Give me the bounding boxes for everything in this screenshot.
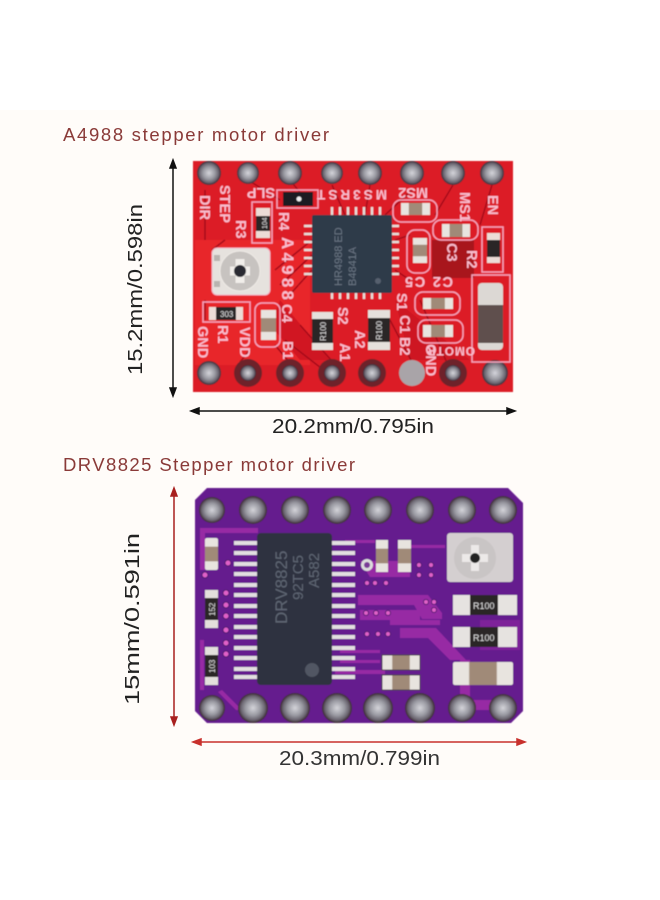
- component outlines: [203, 190, 510, 362]
- silkscreen labels: R1: [214, 325, 230, 344]
- silkscreen labels: A2: [351, 330, 367, 349]
- resistors and capacitors: [209, 192, 503, 350]
- panel: A4988 red board: [193, 161, 513, 392]
- silkscreen labels: S1: [393, 293, 409, 311]
- potentiometer: [212, 248, 270, 295]
- chip: DRV8825: DRV8825: [272, 551, 291, 624]
- vias: [202, 560, 436, 657]
- label: 20.3mm: 20.3mm/0.799in: [279, 748, 440, 770]
- silkscreen labels: SLP: [246, 184, 275, 200]
- heading: DRV8825: DRV8825 Stepper motor driver: [63, 454, 355, 475]
- resistors and capacitors: 104: [262, 217, 269, 229]
- traces: [205, 180, 492, 375]
- chip: HR4988: [304, 207, 399, 299]
- silkscreen labels: R2: [463, 250, 479, 269]
- silkscreen labels: OMOTR: [427, 344, 475, 358]
- background panel: [0, 110, 660, 780]
- silkscreen labels: GND: [422, 344, 438, 376]
- silkscreen labels: MS3RST: [316, 187, 387, 202]
- silkscreen labels: A4988: [278, 237, 297, 300]
- chip: DRV8825: [234, 533, 355, 685]
- label: 15mm: 15mm/0.591in: [122, 533, 144, 705]
- pins: bottom row: [199, 693, 517, 723]
- label: 20.2mm: 20.2mm/0.795in: [272, 416, 434, 438]
- silkscreen labels: EN: [484, 195, 500, 215]
- silkscreen labels: DIR: [196, 195, 212, 220]
- chip: HR4988: B4841A: [347, 246, 359, 286]
- potentiometer: [447, 533, 513, 582]
- resistors and capacitors: 152: [208, 602, 217, 616]
- panel: DRV8825 purple board: [195, 488, 523, 723]
- pins: bottom row: [197, 359, 508, 387]
- dimension arrow: A4988 width: [191, 408, 515, 414]
- copper traces: [200, 528, 520, 710]
- silkscreen labels: A1: [336, 343, 352, 362]
- silkscreen labels: S2: [334, 307, 350, 325]
- silkscreen labels: [194, 184, 500, 376]
- resistors and capacitors: 103: [208, 659, 217, 673]
- silkscreen labels: C3: [443, 243, 459, 262]
- silkscreen labels: MS2: [398, 184, 428, 200]
- resistors and capacitors: R100: [375, 320, 384, 340]
- silkscreen labels: C2 C5: [405, 273, 453, 289]
- silkscreen labels: B2: [396, 337, 412, 356]
- dimension arrow: A4988 height: [170, 160, 176, 396]
- silkscreen labels: B1: [279, 341, 295, 360]
- chip: DRV8825: A582: [306, 553, 323, 588]
- pins: top row: [197, 161, 504, 185]
- label: 15.2mm: 15.2mm/0.598in: [125, 204, 147, 375]
- resistors and capacitors: R100: [319, 321, 328, 341]
- silkscreen labels: VDD: [236, 327, 252, 358]
- silkscreen labels: MS1: [456, 192, 472, 222]
- silkscreen labels: C1: [396, 315, 412, 334]
- silkscreen labels: R3: [232, 220, 248, 239]
- resistors and capacitors: R100: [473, 601, 495, 611]
- resistors and capacitors: [205, 538, 517, 690]
- chip: DRV8825: 92TC5: [290, 555, 307, 600]
- resistors and capacitors: 303: [220, 310, 234, 319]
- silkscreen labels: GND: [194, 326, 210, 358]
- chip: HR4988: HR4988 ED: [333, 227, 345, 286]
- silkscreen labels: STEP: [216, 185, 232, 223]
- dimension arrow: DRV8825 width: [193, 739, 525, 745]
- resistors and capacitors: R100: [473, 633, 495, 643]
- silkscreen labels: R4: [275, 212, 291, 231]
- heading: A4988: A4988 stepper motor driver: [63, 124, 329, 145]
- pins: top row: [199, 496, 517, 524]
- dimension arrow: DRV8825 height: [171, 488, 177, 725]
- silkscreen labels: C4: [278, 304, 294, 323]
